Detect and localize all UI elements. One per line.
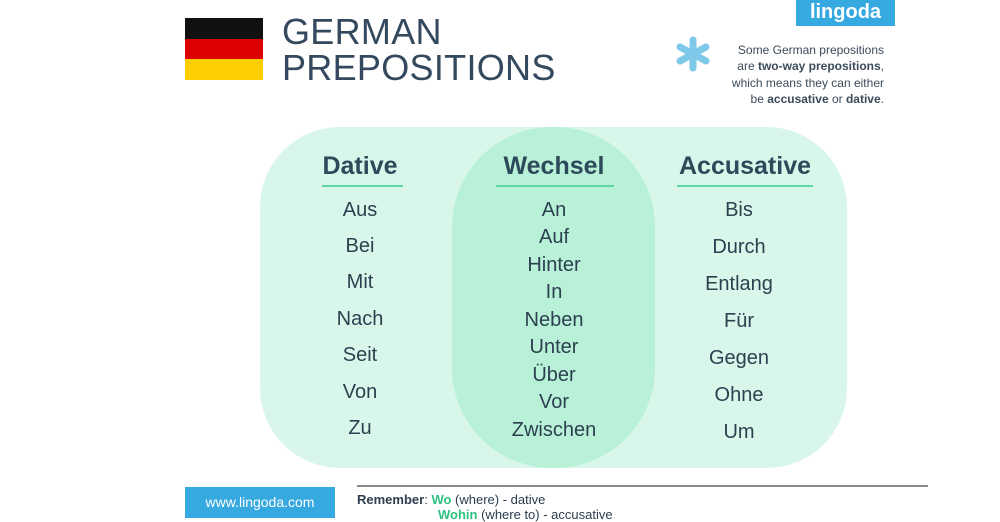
column: accusative: Um (723, 421, 755, 443)
panel: outer (260, 127, 847, 468)
note text: Some German prepositions (738, 43, 884, 57)
column: wechsel: Unter (530, 336, 578, 358)
footer url (185, 487, 335, 518)
column: wechsel: Auf (539, 226, 569, 248)
column: accusative (677, 152, 813, 443)
column: accusative: Bis (725, 199, 753, 221)
column: wechsel: Zwischen (512, 419, 596, 441)
column: wechsel: Neben (525, 309, 583, 331)
column: dative: Nach (337, 308, 383, 330)
note text: which means they can either (732, 76, 884, 90)
note text: are two-way prepositions, (737, 59, 884, 73)
note text: be accusative or dative. (751, 92, 884, 106)
remember note: Remember: Wo (where) - dative (357, 492, 545, 507)
remember note: Wohin (where to) - accusative (438, 507, 613, 522)
footer url: www.lingoda.com (206, 494, 314, 510)
column: wechsel: Wechsel (504, 152, 604, 180)
column: dative: Dative (322, 152, 398, 180)
note text (732, 43, 884, 106)
logo: lingoda (810, 1, 881, 23)
column: dative: Bei (346, 235, 374, 257)
column: dative: Mit (347, 271, 373, 293)
column: dative: Seit (343, 344, 377, 366)
column: dative: Zu (348, 417, 372, 439)
column: accusative: Ohne (715, 384, 763, 406)
column: wechsel: Hinter (527, 254, 581, 276)
icon: asterisk (676, 36, 710, 72)
column: dative (322, 152, 403, 439)
column: wechsel (496, 152, 614, 441)
title: GERMAN (282, 11, 442, 52)
column: dative: Aus (343, 199, 377, 221)
title (282, 11, 556, 88)
column: accusative: Für (724, 310, 754, 332)
column: accusative: Durch (712, 236, 766, 258)
column: wechsel: Über (532, 364, 576, 386)
panel: wechsel (452, 127, 655, 468)
column: accusative: Gegen (709, 347, 769, 369)
column: wechsel: In (546, 281, 562, 303)
column: accusative: Accusative (679, 152, 811, 180)
flag (185, 18, 263, 80)
column: wechsel: Vor (539, 391, 569, 413)
column: wechsel: An (542, 199, 566, 221)
remember note (357, 492, 613, 522)
title: PREPOSITIONS (282, 47, 556, 88)
column: accusative: Entlang (705, 273, 773, 295)
column: dative: Von (343, 381, 377, 403)
logo (796, 0, 895, 26)
